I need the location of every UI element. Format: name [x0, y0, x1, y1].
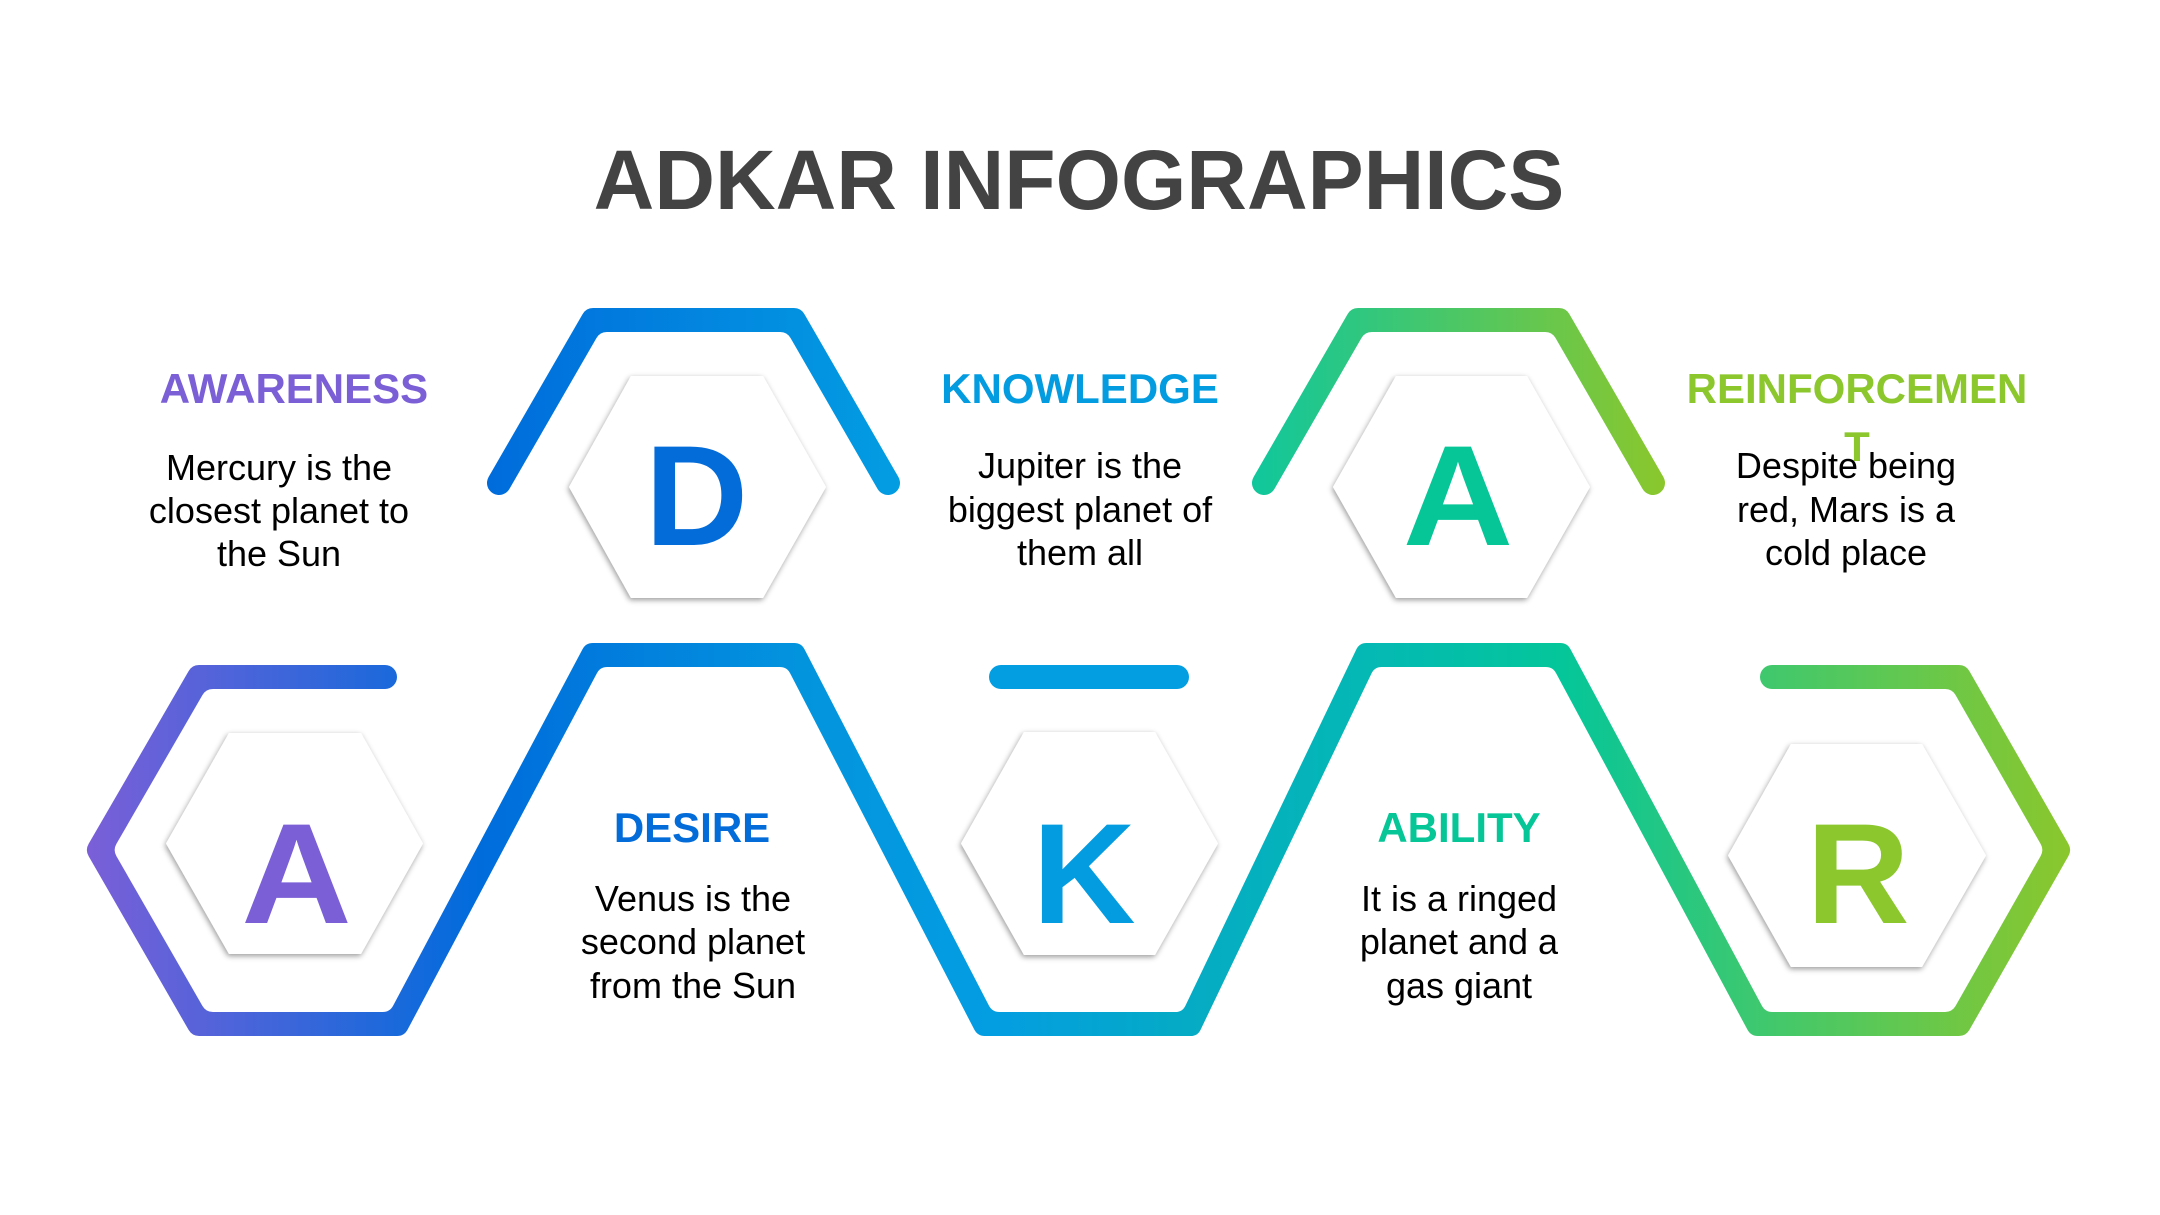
text block: ability: planet and a — [1360, 921, 1559, 962]
text block: awareness: AWARENESS — [160, 365, 428, 412]
hexagon badge: R reinforcement — [1728, 744, 1986, 967]
hexagon badge: D desire — [569, 376, 826, 598]
hexagon badge: A awareness: A — [241, 795, 352, 954]
text block: knowledge: them all — [1017, 532, 1143, 573]
text block: reinforcement: red, Mars is a — [1737, 489, 1956, 530]
text block: reinforcement: cold place — [1765, 532, 1927, 573]
text block: awareness: Mercury is the — [166, 447, 392, 488]
hexagon badge: K knowledge — [961, 732, 1218, 955]
title: ADKAR INFOGRAPHICS — [594, 133, 1564, 227]
text block: ability: ABILITY — [1377, 804, 1541, 851]
hexagon badge: K knowledge: K — [1032, 795, 1136, 954]
text block: knowledge — [941, 365, 1219, 573]
text block: ability: gas giant — [1386, 965, 1532, 1006]
text block: awareness — [149, 365, 428, 574]
text block: ability — [1360, 804, 1559, 1006]
text block: desire: from the Sun — [590, 965, 796, 1006]
text block: reinforcement: REINFORCEMEN — [1687, 365, 2027, 412]
text block: awareness: the Sun — [217, 533, 341, 574]
hexagon badge: D desire: D — [645, 417, 748, 576]
text block: desire: DESIRE — [614, 804, 770, 851]
text block: desire — [581, 804, 805, 1006]
hexagon badge: A ability — [1333, 376, 1590, 598]
K top bar — [989, 665, 1189, 689]
text block: knowledge: KNOWLEDGE — [941, 365, 1219, 412]
text block: knowledge: Jupiter is the — [978, 445, 1182, 486]
text block: ability: It is a ringed — [1361, 878, 1557, 919]
text block: knowledge: biggest planet of — [948, 489, 1213, 530]
text block: desire: second planet — [581, 921, 805, 962]
text block: reinforcement: Despite being — [1736, 445, 1956, 486]
D top cap line — [487, 308, 900, 495]
text block: reinforcement — [1687, 365, 2027, 573]
hexagon badge: A ability: A — [1403, 417, 1513, 576]
hexagon badge: A awareness — [166, 733, 423, 954]
hexagon badge: R reinforcement: R — [1806, 795, 1910, 954]
second A top cap line — [1252, 308, 1665, 495]
text block: desire: Venus is the — [595, 878, 791, 919]
main zigzag hexagon line — [87, 643, 2070, 1036]
text block: awareness: closest planet to — [149, 490, 409, 531]
text block: reinforcement: T — [1844, 423, 1870, 470]
